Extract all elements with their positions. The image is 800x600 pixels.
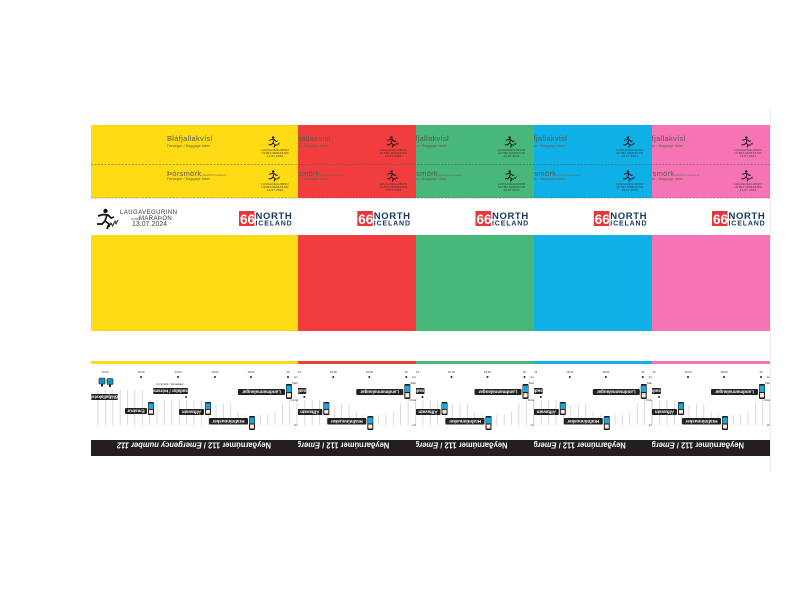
tag logos: LAUGAVEGURINN xyxy=(380,148,407,152)
station: Emstrur xyxy=(125,402,154,415)
tag logo upper: LAUGAVEGURINN xyxy=(261,148,289,152)
stations xyxy=(416,382,534,430)
race logo: Laugavegurinn Ultra Marathon: MARAÞON xyxy=(139,216,172,222)
colour strip: yellow xyxy=(91,361,298,364)
time axis labels: 20 xyxy=(523,370,526,374)
time axis labels: 18:00 xyxy=(248,370,255,374)
station: Landmannalaugar: Start xyxy=(292,381,298,385)
sponsor logo: 66 North Iceland: NORTH xyxy=(374,211,411,222)
time axis labels: 20 xyxy=(641,370,645,374)
stations: Start xyxy=(647,381,653,385)
stations: Finish xyxy=(410,398,417,402)
sponsor logo: 66 North Iceland: NORTH xyxy=(256,211,292,222)
time axis labels: 14 xyxy=(534,370,538,374)
time axis labels: 16:00 xyxy=(566,370,574,374)
panel: red block xyxy=(298,235,416,331)
time axis labels: 16:00 xyxy=(684,370,692,374)
time axis labels: 20 xyxy=(759,370,763,374)
sponsor logo: 66 North Iceland: 66 xyxy=(358,212,374,227)
baggage labels: Bláfjallakvísl xyxy=(522,134,567,143)
elevation profile lines xyxy=(422,399,534,425)
sponsor logo: 66 North Iceland: 66 xyxy=(240,212,256,227)
baggage labels: Farangur / Baggage label xyxy=(522,144,565,148)
baggage labels xyxy=(640,134,699,181)
baggage labels: Bláfjallakvísl xyxy=(285,134,331,143)
stations: Húsadalur / Þórsmörk xyxy=(383,388,430,394)
sponsor logo: 66 North Iceland xyxy=(712,211,766,228)
colour strip: red xyxy=(298,361,416,364)
race logo: Laugavegurinn Ultra Marathon xyxy=(97,209,177,229)
emergency bar background xyxy=(91,440,770,456)
sponsor logo: 66 North Iceland: ICELAND xyxy=(728,220,766,228)
baggage label: Bláfjallakvísl: Farangur / Baggage label xyxy=(167,144,210,148)
stations: Álftavatn xyxy=(300,410,319,416)
emergency number text, inverted: Neyðarnúmer 112 / Emergency number 112 xyxy=(590,440,744,450)
race logo: Laugavegurinn Ultra Marathon: LAUGAVEGURINN xyxy=(120,210,177,216)
tag logos: 13.07.2024 xyxy=(740,154,756,158)
tag logos xyxy=(616,136,644,192)
baggage labels: Þórsmörk(Hrafntinnusker) xyxy=(285,169,345,178)
time axis labels: 10:00 xyxy=(102,370,109,374)
repeating unit: blue xyxy=(534,136,652,449)
tag logo lower xyxy=(261,170,289,192)
sponsor logo: 66 North Iceland: ICELAND xyxy=(256,220,293,228)
sponsor logo: 66 North Iceland: ICELAND xyxy=(374,220,411,228)
panel: pink colour band, top xyxy=(652,125,770,198)
time axis labels: km xyxy=(412,375,417,379)
tag logos: ULTRA MARAÞON xyxy=(380,185,407,189)
sponsor logo: 66 North Iceland: NORTH xyxy=(728,211,765,222)
time axis labels xyxy=(102,371,298,378)
baggage labels: Farangur / Baggage label xyxy=(640,144,683,148)
baggage label: Þórsmörk xyxy=(167,170,226,181)
time axis labels: 16:00 xyxy=(448,370,455,374)
station: Landmannalaugar xyxy=(238,381,299,427)
time axis labels xyxy=(416,371,534,378)
race logo: Laugavegurinn Ultra Marathon: ULTRA xyxy=(131,217,140,221)
race logo: Laugavegurinn Ultra Marathon: 13.07.2024 xyxy=(132,221,167,228)
tag logos: 13.07.2024 xyxy=(503,188,520,192)
tag logos: LAUGAVEGURINN xyxy=(616,148,644,152)
stations: Hrafntinnusker xyxy=(567,419,599,424)
colour strip: pink xyxy=(652,361,770,364)
time axis labels: 14 xyxy=(416,370,419,374)
elevation profile lines xyxy=(98,390,298,425)
tag logo lower: LAUGAVEGURINN xyxy=(261,182,289,186)
time axis labels: 20 xyxy=(405,370,408,374)
repeating unit: pink xyxy=(590,134,772,450)
elevation profile lines xyxy=(304,399,416,425)
tag logo upper: 13.07.2024 xyxy=(267,154,283,158)
tag logos: ULTRA MARAÞON xyxy=(498,185,525,189)
stations: Hrafntinnusker xyxy=(331,419,363,424)
sponsor logo: 66 North Iceland xyxy=(476,211,528,226)
panel: yellow block xyxy=(91,235,298,331)
repeating unit: green xyxy=(416,136,534,449)
sponsor logo: 66 North Iceland: ICELAND xyxy=(610,220,647,228)
stations: Húsadalur / Þórsmörk xyxy=(265,388,312,394)
tag logos: LAUGAVEGURINN xyxy=(734,148,762,152)
sponsor logo: 66 North Iceland: 66 xyxy=(476,212,492,227)
tag logos: LAUGAVEGURINN xyxy=(734,182,762,186)
time axis labels: km xyxy=(531,375,535,379)
sponsor logo: 66 North Iceland: 66 xyxy=(595,212,610,227)
tag logos xyxy=(734,136,762,192)
baggage label: Bláfjallakvísl: Bláfjallakvísl xyxy=(167,134,212,143)
baggage label: Þórsmörk: Þórsmörk(Hrafntinnusker) xyxy=(167,169,226,178)
baggage labels: Þórsmörk(Hrafntinnusker) xyxy=(640,169,699,178)
baggage labels: Farangur / Baggage label xyxy=(285,177,328,181)
time axis labels: km xyxy=(767,375,772,379)
panel: green colour band, top xyxy=(416,125,534,198)
time axis labels xyxy=(298,371,416,378)
baggage labels: Bláfjallakvísl xyxy=(404,134,449,143)
panel: green block xyxy=(416,235,534,331)
station: Hrafntinnusker: Hrafntinnusker xyxy=(212,419,245,424)
colour strip: blue xyxy=(534,361,652,364)
time axis labels: 18:00 xyxy=(602,370,610,374)
time axis labels: 16:00 xyxy=(330,370,337,374)
panel: blue colour band, top xyxy=(534,125,652,198)
stations: Húsadalur / Þórsmörk xyxy=(620,388,667,394)
time axis labels xyxy=(652,370,772,379)
tag logos: ULTRA MARAÞON xyxy=(380,151,407,155)
sponsor logo: 66 North Iceland xyxy=(594,211,646,226)
baggage labels: Farangur / Baggage label xyxy=(522,177,565,181)
tag logos: ULTRA MARAÞON xyxy=(734,151,762,155)
stations xyxy=(534,382,652,430)
stations: Álftavatn xyxy=(655,410,674,416)
sponsor logo: 66 North Iceland: NORTH xyxy=(492,211,529,222)
stations: km xyxy=(412,423,417,427)
tag logos: 13.07.2024 xyxy=(385,154,402,158)
stations: km xyxy=(531,423,535,427)
elevation profile lines xyxy=(652,385,770,425)
colour strip: green xyxy=(416,361,534,364)
tag logos: LAUGAVEGURINN xyxy=(380,182,407,186)
stations xyxy=(620,381,772,430)
tag logos: LAUGAVEGURINN xyxy=(616,182,644,186)
repeating unit: yellow xyxy=(91,134,299,450)
sponsor logo: 66 North Iceland: 66 xyxy=(713,212,729,227)
sponsor logo: 66 North Iceland xyxy=(239,211,292,226)
station: Landmannalaugar: Finish xyxy=(291,398,299,402)
tag logos: 13.07.2024 xyxy=(385,188,402,192)
tag logos xyxy=(380,136,407,192)
station: Húsadalur xyxy=(153,383,188,398)
station: Emstrur: Emstrur xyxy=(127,408,145,414)
panel: yellow colour band, top xyxy=(91,125,298,198)
station: Landmannalaugar: km xyxy=(294,423,299,427)
tag logos: 13.07.2024 xyxy=(503,154,520,158)
time axis labels: 14 xyxy=(298,370,301,374)
time axis labels: 12:00 xyxy=(138,370,145,374)
stations: km xyxy=(767,423,772,427)
stations: Landmannalaugar xyxy=(715,390,754,394)
tag logos: 13.07.2024 xyxy=(622,154,638,158)
elevation profile lines xyxy=(534,399,652,425)
station: Hrafntinnusker xyxy=(209,416,255,430)
stations: Álftavatn xyxy=(418,410,438,416)
stations: Finish xyxy=(528,398,536,402)
stations xyxy=(298,382,416,430)
tag logos xyxy=(498,136,525,192)
baggage labels: Farangur / Baggage label xyxy=(404,177,447,181)
repeating unit: red xyxy=(298,136,416,449)
station: Húsadalur: Þórsmörk / Húsadalur xyxy=(156,382,184,386)
baggage labels: Farangur / Baggage label xyxy=(285,144,328,148)
stations: Landmannalaugar xyxy=(597,390,636,394)
panel: red colour band, top xyxy=(298,125,416,198)
baggage labels xyxy=(416,136,462,181)
stations: Landmannalaugar xyxy=(360,390,399,394)
emergency number text, inverted: Neyðarnúmer 112 / Emergency number 112 xyxy=(471,440,626,450)
time axis labels: km xyxy=(294,375,299,379)
stations: Start xyxy=(529,381,535,385)
stations: Finish xyxy=(646,398,654,402)
time axis labels: 20 xyxy=(286,370,290,374)
time axis labels: 14:00 xyxy=(174,370,182,374)
tag logos: ULTRA MARAÞON xyxy=(498,151,525,155)
tag logos: 13.07.2024 xyxy=(740,188,756,192)
baggage label: Bláfjallakvísl xyxy=(167,136,212,148)
time axis labels: km xyxy=(649,375,653,379)
baggage labels: Bláfjallakvísl xyxy=(640,134,685,143)
stations: Start xyxy=(765,381,771,385)
tag logo lower: ULTRA MARAÞON xyxy=(261,185,289,189)
station: Álftavatn: Álftavatn xyxy=(182,410,201,416)
time axis labels: 14 xyxy=(652,370,656,374)
emergency number text, inverted: Neyðarnúmer 112 / Emergency number 112 xyxy=(117,440,271,450)
station label: Bláfjallakvísl: Bláfjallakvísl xyxy=(91,394,118,400)
baggage labels xyxy=(298,136,344,181)
tag logo lower: 13.07.2024 xyxy=(267,188,283,192)
tag logos: LAUGAVEGURINN xyxy=(498,182,525,186)
station: Álftavatn xyxy=(179,402,211,416)
stations: Húsadalur / Þórsmörk xyxy=(501,388,549,394)
time axis labels: 18:00 xyxy=(366,370,373,374)
sponsor logo: 66 North Iceland: ICELAND xyxy=(492,220,529,228)
baggage labels: Þórsmörk(Hrafntinnusker) xyxy=(522,169,581,178)
stations: km xyxy=(649,423,653,427)
station: Landmannalaugar: Landmannalaugar xyxy=(242,390,281,394)
emergency number text, inverted: Neyðarnúmer 112 / Emergency number 112 xyxy=(235,440,389,450)
panel: blue block xyxy=(534,235,652,331)
small markers xyxy=(99,378,113,387)
tag logos: ULTRA MARAÞON xyxy=(734,185,762,189)
stations: Hrafntinnusker xyxy=(685,419,718,424)
stations: Hrafntinnusker xyxy=(449,419,481,424)
sponsor logo: 66 North Iceland: NORTH xyxy=(610,211,647,222)
station: Húsadalur: Húsadalur / Þórsmörk xyxy=(147,388,194,394)
tag logos: LAUGAVEGURINN xyxy=(498,148,525,152)
time axis labels xyxy=(534,371,652,378)
baggage labels xyxy=(534,136,581,181)
tag logos: 13.07.2024 xyxy=(622,188,638,192)
baggage labels: Farangur / Baggage label xyxy=(640,177,683,181)
tag logos: ULTRA MARAÞON xyxy=(616,185,643,189)
tag logos: ULTRA MARAÞON xyxy=(616,151,643,155)
baggage labels: Þórsmörk(Hrafntinnusker) xyxy=(404,169,463,178)
tag logo upper xyxy=(261,136,289,158)
stations: Finish xyxy=(764,398,772,402)
stations: Start xyxy=(410,381,416,385)
stations: Álftavatn xyxy=(536,410,556,416)
baggage label: Þórsmörk: Farangur / Baggage label xyxy=(167,177,210,181)
baggage labels: Farangur / Baggage label xyxy=(404,144,447,148)
sponsor logo: 66 North Iceland xyxy=(357,211,410,226)
emergency number text, inverted: Neyðarnúmer 112 / Emergency number 112 xyxy=(353,440,508,450)
tag logo upper: ULTRA MARAÞON xyxy=(261,151,289,155)
time axis labels: 16:00 xyxy=(212,370,219,374)
time axis labels: 18:00 xyxy=(484,370,491,374)
panel: pink block xyxy=(652,235,770,331)
time axis labels: 18:00 xyxy=(720,370,728,374)
stations: Landmannalaugar xyxy=(478,390,517,394)
